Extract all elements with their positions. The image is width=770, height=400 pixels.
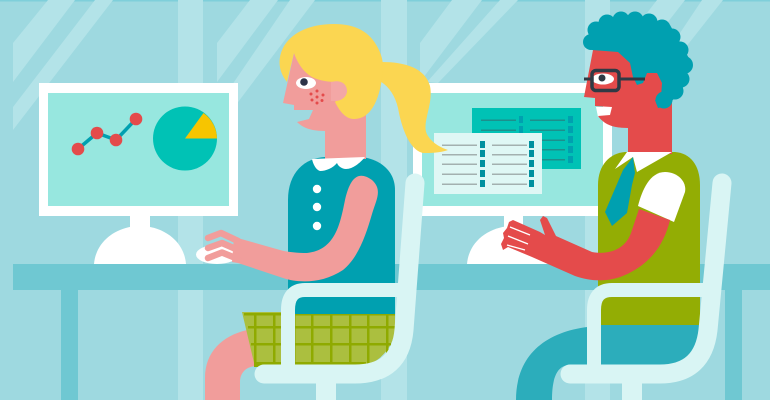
eye xyxy=(592,74,614,84)
fingers xyxy=(208,233,238,259)
paper table xyxy=(434,133,542,194)
ear xyxy=(331,81,347,101)
eye xyxy=(296,77,316,89)
collar xyxy=(312,157,365,171)
trousers xyxy=(600,325,700,365)
arm xyxy=(501,209,670,280)
man xyxy=(501,12,700,400)
hair xyxy=(280,24,383,119)
dress xyxy=(288,157,395,314)
freckles xyxy=(310,90,324,104)
vest xyxy=(598,152,700,325)
chair: left xyxy=(264,183,415,400)
buttons xyxy=(313,185,321,230)
leg xyxy=(516,326,600,400)
woman xyxy=(205,24,448,400)
fingers xyxy=(507,227,530,250)
monitor: right xyxy=(413,83,612,264)
pie chart xyxy=(153,106,217,170)
monitor: left xyxy=(39,83,238,264)
ponytail xyxy=(378,62,448,153)
leg xyxy=(205,330,260,400)
glasses xyxy=(584,70,645,90)
skirt xyxy=(242,312,395,367)
neck and head xyxy=(584,50,672,154)
hair xyxy=(583,12,693,108)
arm xyxy=(232,176,378,281)
collar xyxy=(615,152,672,172)
neck and head xyxy=(283,53,366,159)
computer mouse xyxy=(196,245,238,264)
line chart xyxy=(72,113,142,155)
chair: right xyxy=(570,183,722,400)
table on screen xyxy=(472,108,581,169)
sleeve xyxy=(638,172,685,222)
tie xyxy=(605,157,635,226)
mouth xyxy=(596,107,612,117)
desk xyxy=(13,264,770,400)
